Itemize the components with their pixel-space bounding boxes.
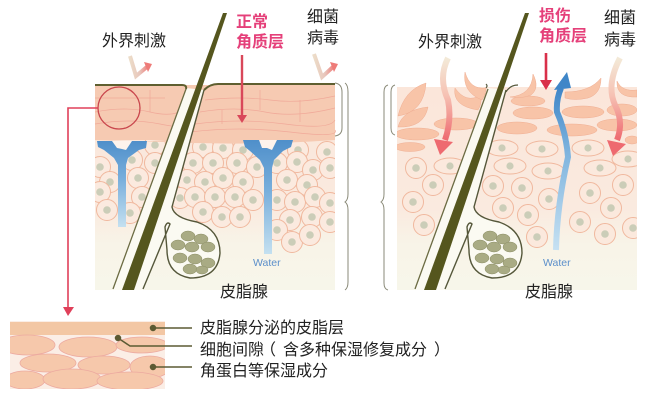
cells: normal skin [90,134,340,252]
arrow: normal stratum corneum [237,55,247,123]
heading: normal stratum corneum: 正常 [236,13,268,31]
legend: intercellular space: ） [434,341,450,359]
arrow: irritant right [607,58,626,156]
label: Water: Water [543,257,571,269]
legend: intercellular space: 含多种保湿修复成分 [283,341,427,359]
label: sebaceous gland right: 皮脂腺 [525,283,573,301]
label: external irritants left: 外界刺激 [102,32,166,50]
lower skin background [397,87,637,290]
small arrow: bacteria reflected [314,54,334,77]
panel: magnified detail [10,321,165,389]
label: external irritants right: 外界刺激 [418,33,482,51]
legend: sebum layer: 皮脂腺分泌的皮脂层 [200,319,344,337]
arrow: irritant left [434,58,453,155]
water channel: left [97,141,147,227]
lower skin background [95,86,335,290]
flaking corneocytes [395,72,639,152]
sebum layer [10,322,165,335]
arrow: damaged stratum corneum [540,53,552,90]
water channel: right [243,140,293,254]
legend: keratin: 角蛋白等保湿成分 [200,362,328,380]
skin surface lines [95,84,335,90]
label: viruses left: 病毒 [307,29,339,47]
notches in water channels [112,140,277,150]
label: Water: Water [253,257,281,269]
heading: normal stratum corneum line 2: 角质层 [236,32,284,51]
small arrow head [330,62,338,72]
hair and sebaceous gland [415,13,529,290]
legend: intercellular space: 细胞间隙 [200,342,264,359]
magnifier circle and leader [63,87,140,316]
heading: damaged stratum corneum: 损伤 [539,7,571,25]
braces [335,83,395,290]
corneocytes [0,335,170,390]
leader lines [116,326,192,370]
panel: damaged skin [395,13,644,290]
hair and sebaceous gland [113,13,227,290]
cells: damaged skin [402,140,644,248]
heading: damaged stratum corneum line 2: 角质层 [539,26,587,45]
label: bacteria right: 细菌 [604,9,636,27]
arrow: water escaping upward [554,72,571,250]
label: sebaceous gland left: 皮脂腺 [220,283,268,301]
small arrow: irritant reflected [130,56,148,76]
panel: normal skin [90,13,340,290]
small arrow head [144,62,152,72]
short surface ticks [486,84,518,92]
label: viruses right: 病毒 [604,31,636,49]
stratum corneum band [95,85,335,144]
label: bacteria left: 细菌 [307,8,339,26]
legend: intercellular space: （ [260,341,276,359]
